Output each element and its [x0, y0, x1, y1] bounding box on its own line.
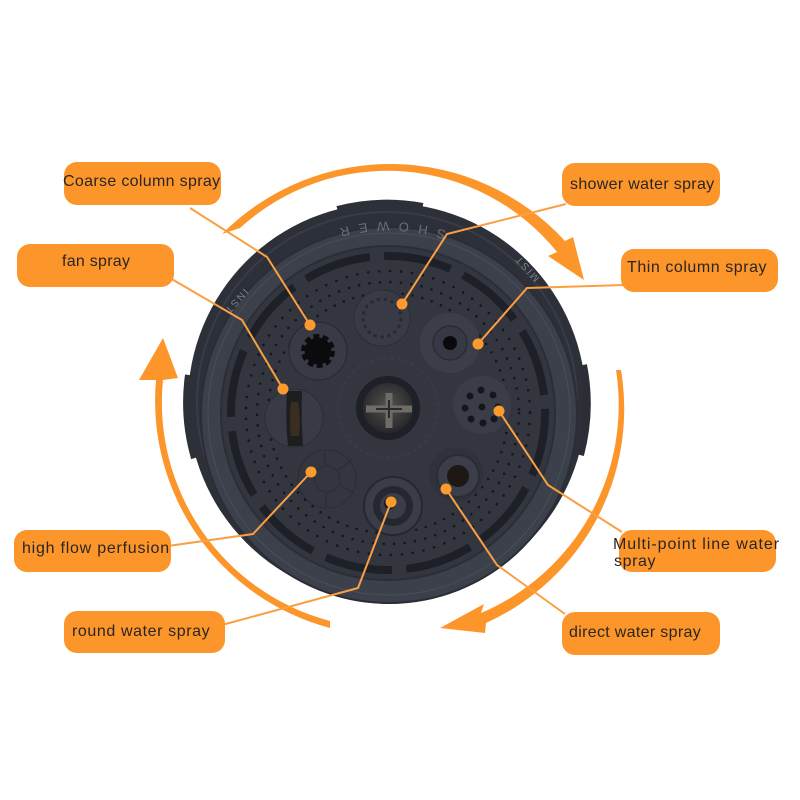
front ring [201, 227, 577, 603]
callout: Coarse column spray [63, 162, 316, 330]
callout: high flow perfusion [14, 466, 316, 572]
callout: Multi-point line water spray: spray [614, 553, 656, 570]
nozzle head photo: INST [221, 286, 250, 316]
callout: shower water spray [396, 163, 720, 310]
callout: fan spray: fan spray [62, 253, 130, 270]
callout: round water spray: round water spray [72, 623, 210, 640]
nozzle: high flow [298, 450, 356, 508]
callout: round water spray [64, 496, 396, 653]
nozzle: round [364, 477, 422, 535]
nozzle: direct [429, 447, 483, 501]
nozzle: coarse column [289, 322, 347, 380]
callout: Thin column spray: Thin column spray [627, 259, 767, 276]
slots [227, 252, 549, 574]
rim lettering: SHOWER [340, 222, 446, 239]
callout: Coarse column spray: Coarse column spray [63, 173, 220, 190]
nozzle head photo [183, 200, 591, 604]
nozzle: multi point [453, 376, 511, 434]
callout: fan spray [17, 244, 288, 394]
callout: Thin column spray [472, 249, 778, 350]
callout: direct water spray [440, 484, 720, 655]
callout: high flow perfusion: high flow perfusion [22, 540, 170, 557]
callout: Multi-point line water spray: Multi-point line water [613, 536, 780, 553]
outer rim [188, 203, 586, 601]
nozzle: thin column [420, 313, 480, 373]
inner face [221, 246, 555, 580]
nozzle head photo: MIST [513, 252, 542, 283]
nozzle: shower [354, 290, 410, 346]
arrow: left clockwise [139, 338, 330, 628]
callout: shower water spray: shower water spray [570, 176, 714, 193]
screw [356, 376, 420, 440]
callout: Multi-point line water spray [494, 406, 780, 572]
nozzle: fan [265, 389, 323, 447]
arrow: right clockwise [440, 370, 624, 633]
central boss [333, 353, 443, 463]
callout: direct water spray: direct water spray [569, 624, 701, 641]
arrow: top clockwise [222, 164, 584, 280]
dot rings [246, 271, 530, 555]
